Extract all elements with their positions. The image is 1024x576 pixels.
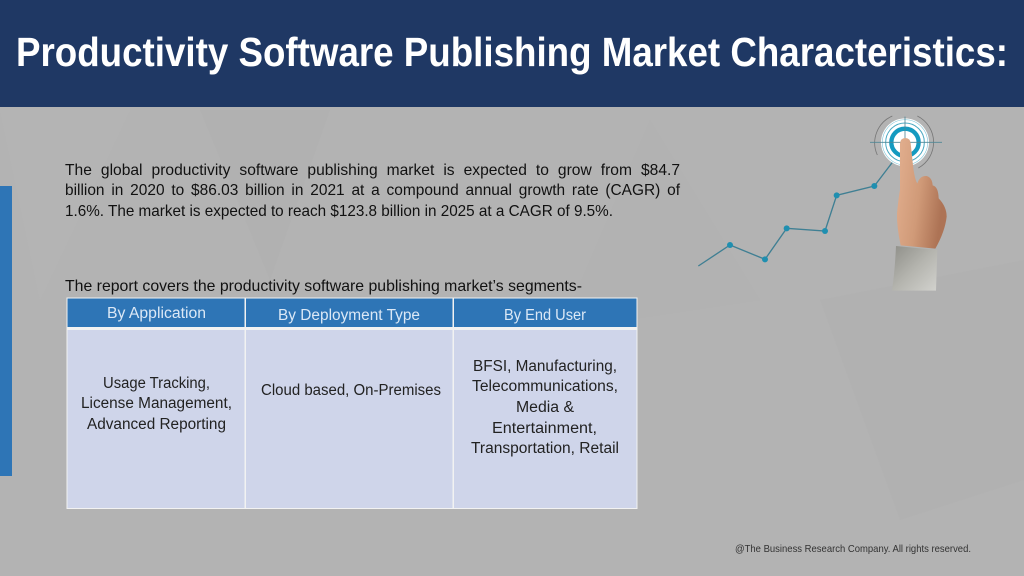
cell: end user: Transportation, Retail <box>471 440 619 457</box>
title banner <box>0 0 1024 107</box>
cell: application: Usage Tracking, <box>103 375 210 392</box>
target icon <box>870 116 942 168</box>
intro paragraph: billion in 2020 to $86.03 billion in 2021 at a compound annual growth rate (CAGR) of <box>65 182 681 199</box>
intro paragraph: 1.6%. The market is expected to reach $123.8 billion in 2025 at a CAGR of 9.5%. <box>65 203 613 220</box>
intro paragraph: The global productivity software publishing market is expected to grow from $84.7 <box>65 162 680 179</box>
left accent bar <box>0 186 12 476</box>
cell: end user: BFSI, Manufacturing, <box>473 358 617 375</box>
table header: By Deployment Type <box>278 307 420 324</box>
cell: end user <box>471 358 619 457</box>
segments table <box>66 298 638 509</box>
growth chart with hand icon <box>698 116 947 291</box>
line chart <box>698 157 897 266</box>
cell: deployment: Cloud based, On-Premises <box>261 382 441 399</box>
cell: end user: Telecommunications, <box>472 378 618 395</box>
cell: application <box>81 375 232 433</box>
hand pointing <box>897 138 947 249</box>
copyright footer: @The Business Research Company. All rights reserved. <box>735 543 971 555</box>
shirt cuff <box>892 246 937 291</box>
intro paragraph <box>65 162 681 220</box>
table header: By Application <box>107 305 206 322</box>
segments intro text: The report covers the productivity software publishing market’s segments- <box>65 278 582 295</box>
cell: application: License Management, <box>81 395 232 412</box>
cell: application: Advanced Reporting <box>87 416 226 433</box>
table body <box>68 330 636 508</box>
table header <box>68 298 636 327</box>
table header: By End User <box>504 307 586 324</box>
cell: end user: Entertainment, <box>492 420 597 437</box>
cell: end user: Media & <box>516 399 575 416</box>
